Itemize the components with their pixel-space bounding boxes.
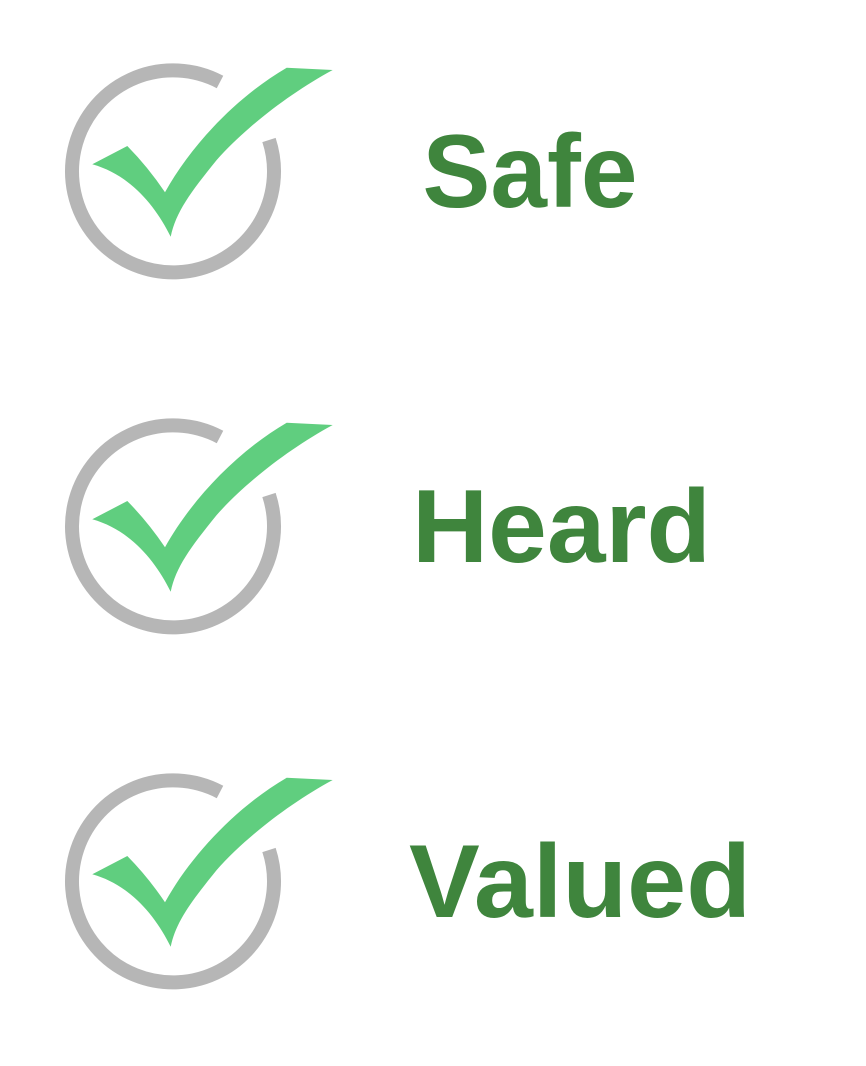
label: Safe: Safe (422, 114, 638, 230)
icon: check mark in circle, Heard (72, 423, 333, 627)
icon: check mark in circle, Safe (72, 68, 333, 272)
icon: check mark in circle, Valued (72, 778, 333, 982)
checklist item: Valued (72, 778, 751, 982)
label: Heard: Heard (412, 469, 711, 585)
label: Valued: Valued (409, 824, 751, 940)
checklist item: Safe (72, 68, 637, 272)
checklist item: Heard (72, 423, 711, 627)
